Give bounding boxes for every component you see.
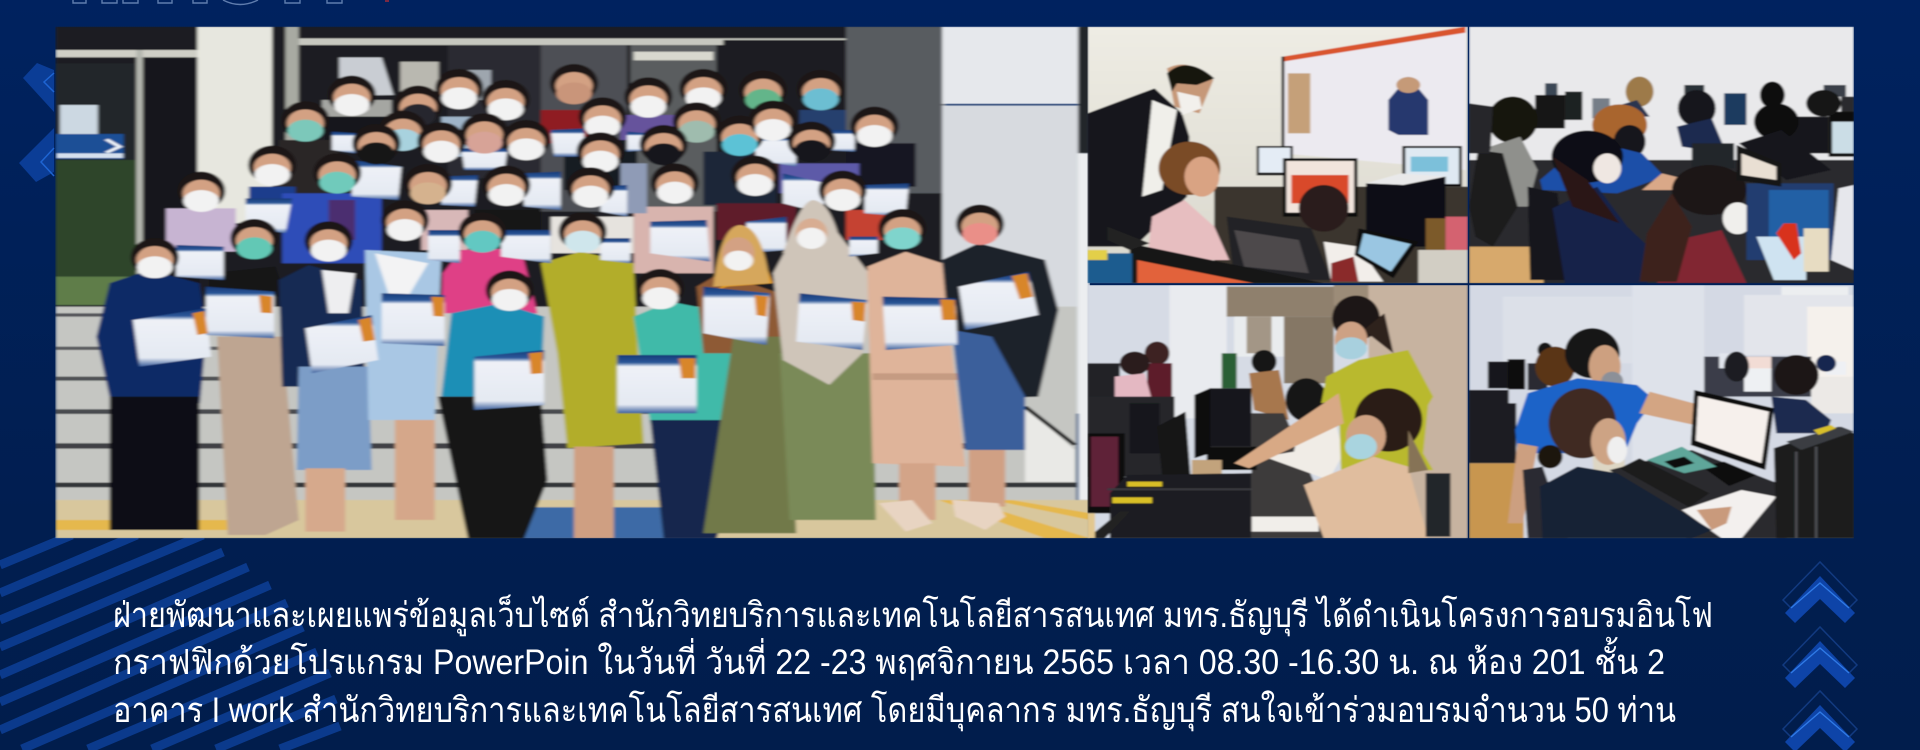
computer towers — [1774, 425, 1854, 538]
desk, monitor and keyboard — [1610, 390, 1786, 538]
seated woman peach blouse — [1304, 388, 1451, 538]
laptop and front monitor — [1087, 217, 1331, 283]
building facade — [55, 27, 1090, 500]
signs and posters — [55, 57, 491, 159]
seated woman — [1523, 388, 1732, 538]
decorative stripes bottom left — [0, 535, 340, 749]
computer row and floor — [1469, 83, 1854, 283]
certificate colour accents — [193, 273, 1033, 378]
hijab faces — [713, 200, 843, 287]
photo: trainer in yellow dress — [1087, 285, 1468, 538]
desk and monitors — [1214, 146, 1468, 283]
chevron 2 — [1783, 627, 1857, 688]
child with tablet — [1299, 185, 1418, 282]
photo: trainer pointing at monitor — [1469, 285, 1854, 538]
trainee navy jacket — [1552, 131, 1652, 283]
tower, monitors and tote bag — [1737, 145, 1854, 280]
certificates — [133, 128, 1038, 413]
faces with masks — [131, 64, 1004, 311]
trainer yellow dress — [1234, 296, 1433, 473]
front row: bodies — [96, 200, 1058, 538]
trainees background — [1469, 77, 1841, 247]
line 2: กราฟฟิกด้วยโปรแกรม PowerPoin ในวันที่ วันที่ 22 -23 พฤศจิกายน 2565 เวลา 08.30 -16.30 น. ณ ห้อง 201 ชั้น 2 — [113, 636, 1665, 682]
wall, column and curtains — [1087, 285, 1468, 538]
background computers and people — [1469, 343, 1854, 538]
desk and keyboard — [1192, 413, 1339, 538]
decorative chevrons right — [1783, 562, 1857, 750]
seated trainee white shirt — [1264, 378, 1344, 480]
background trainees — [1087, 342, 1289, 513]
entrance steps — [55, 307, 1077, 502]
seated woman — [1147, 142, 1229, 260]
white wall — [1469, 27, 1854, 160]
towers with yellow labels — [1087, 473, 1252, 538]
photo: instructor at projector screen — [1087, 27, 1468, 283]
chevron 1 — [1783, 562, 1857, 623]
room wall — [1087, 27, 1468, 283]
line 3: อาคาร I work สำนักวิทยบริการและเทคโนโลยีสารสนเทศ โดยมีบุคลากร มทร.ธัญบุรี สนใจเข้าร่วมอบรมจำนวน 50 ท่าน — [113, 690, 1676, 731]
line 1: ฝ่ายพัฒนาและเผยแพร่ข้อมูลเว็บไซต์ สำนักวิทยบริการและเทคโนโลยีสารสนเทศ มทร.ธัญบุรี ได้ดำเนินโครงการอบรมอินโฟ — [113, 594, 1713, 636]
cropped title remnant — [73, 0, 389, 4]
back rows: bodies — [166, 110, 916, 273]
wall and column — [1469, 285, 1854, 538]
paved floor and mat — [55, 500, 1090, 538]
helper leaning in blue — [1528, 104, 1689, 280]
photo: group portrait — [55, 27, 1090, 538]
projector screen — [1283, 27, 1465, 170]
photo: trainees at computers — [1469, 27, 1854, 283]
man in black jacket — [1087, 64, 1214, 247]
description text — [113, 594, 1713, 731]
trainer blue polo — [1506, 328, 1696, 524]
decorative chevrons left — [19, 63, 54, 182]
trainee red top — [1640, 165, 1752, 283]
chevron 3 — [1783, 691, 1857, 750]
